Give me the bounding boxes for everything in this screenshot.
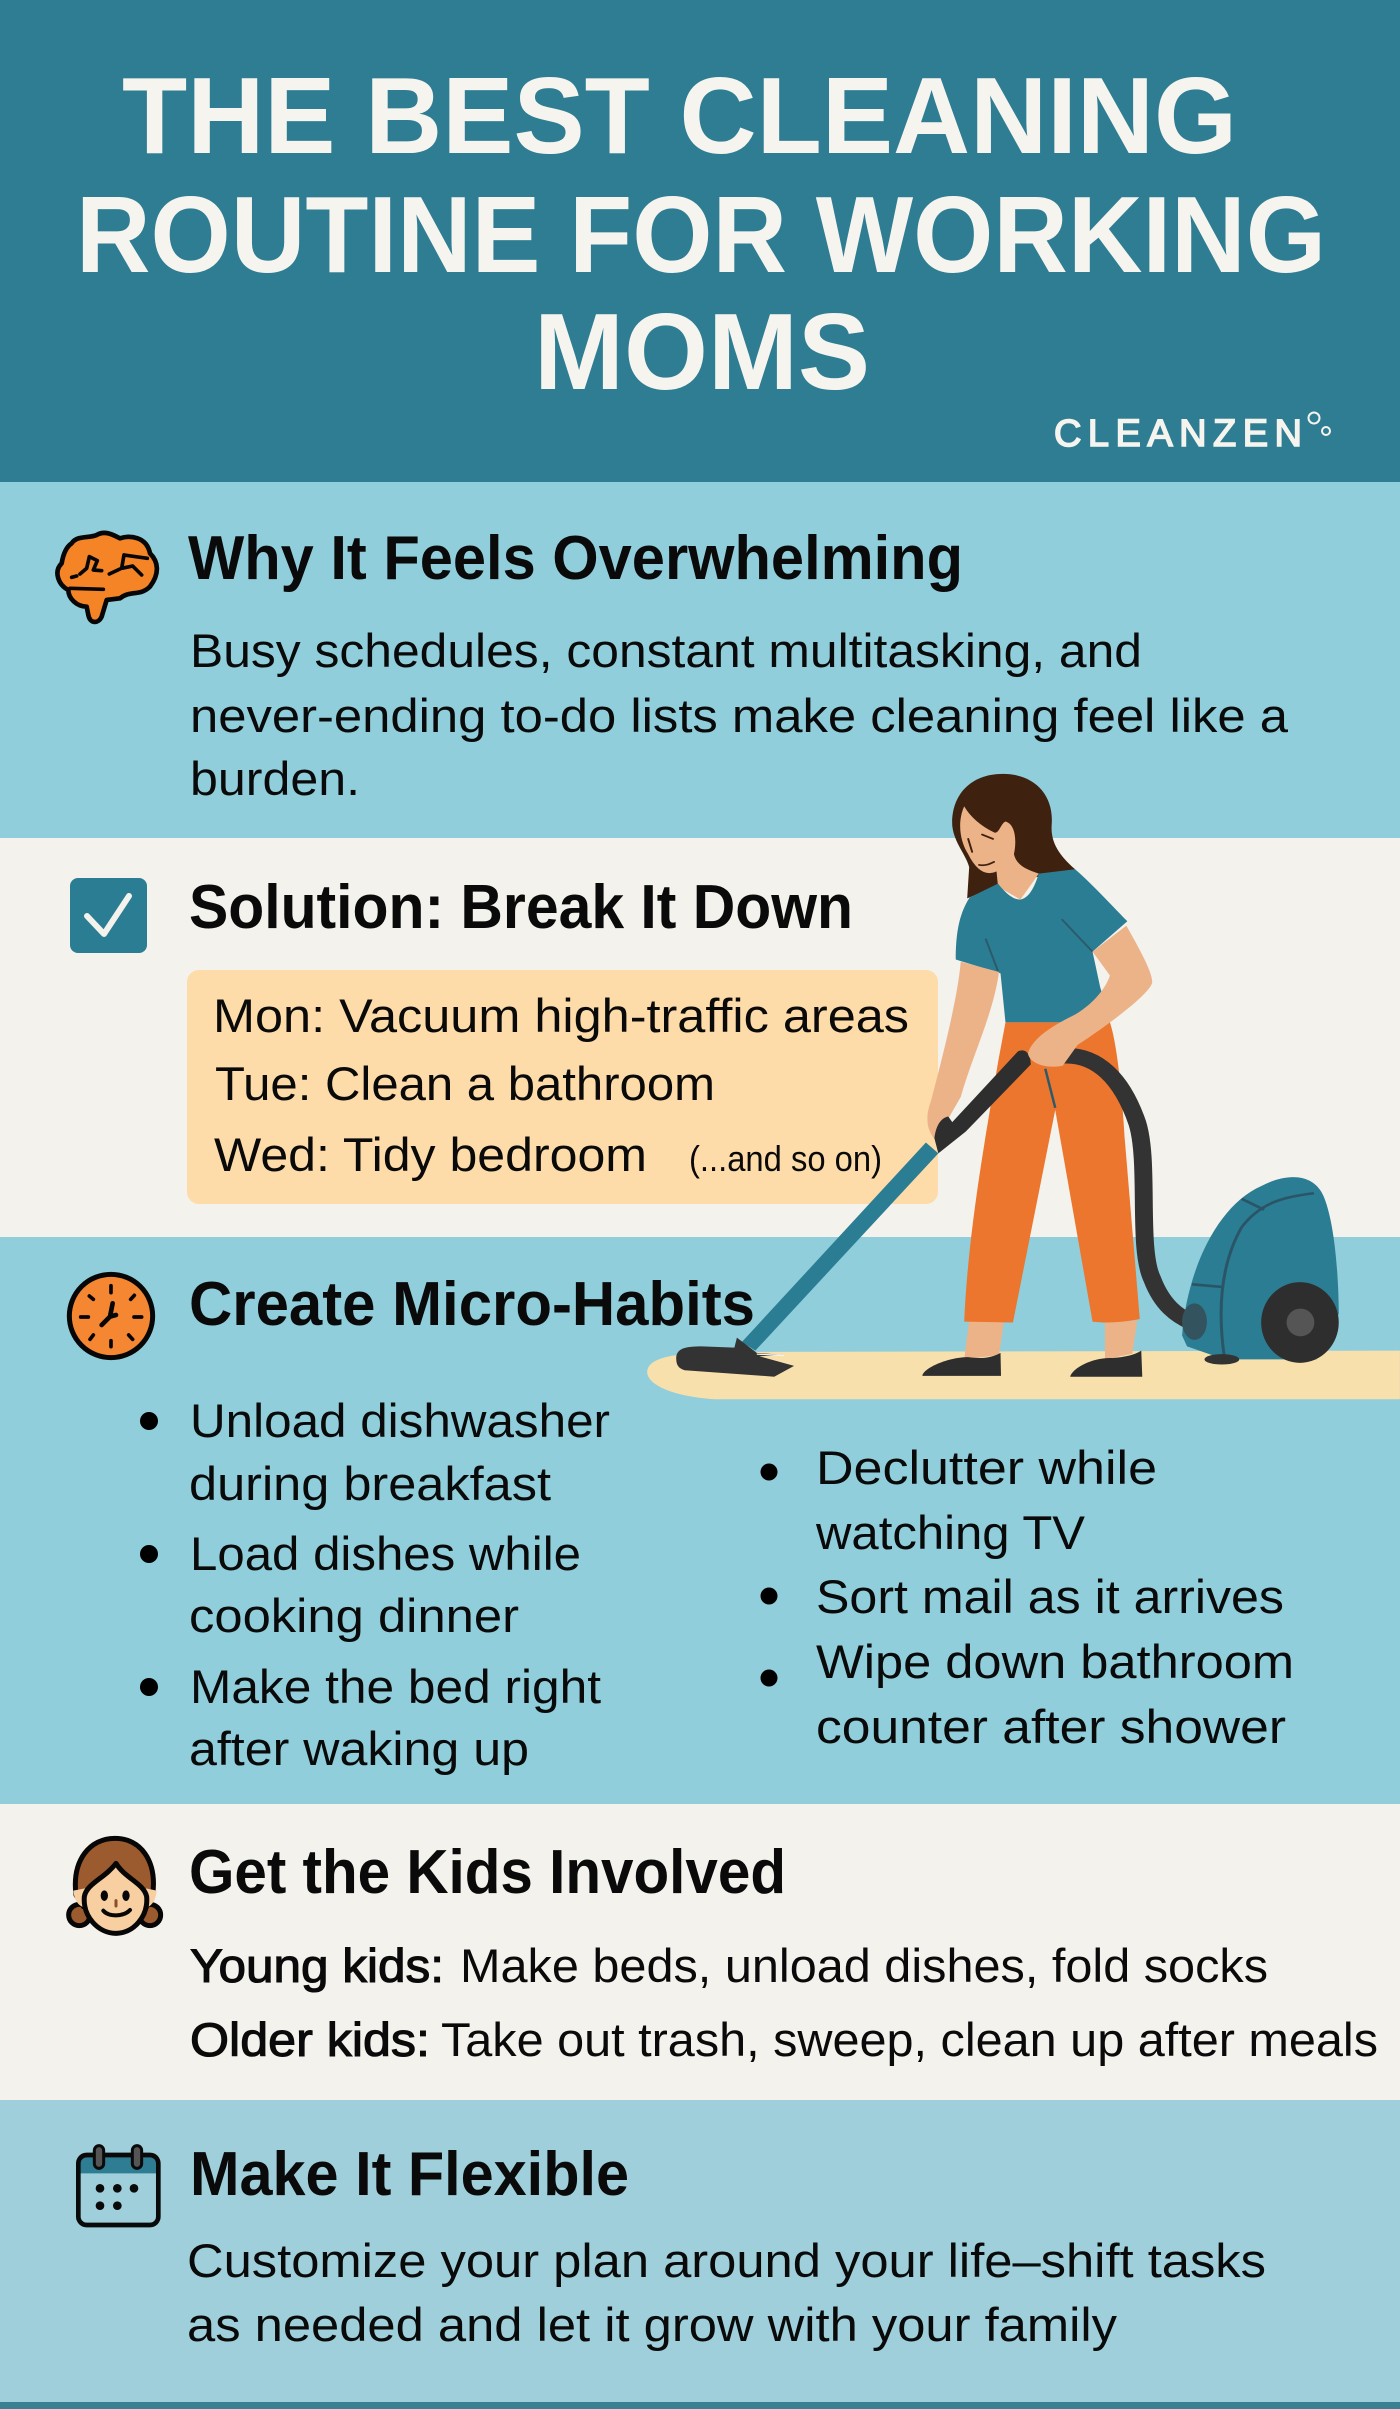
- bullet list: right column: watching TV: [815, 1506, 1086, 1559]
- text block: why it feels overwhelming: Busy schedules, constant multitasking, and: [190, 624, 1142, 677]
- floor: [647, 1351, 1400, 1399]
- left arm: [927, 962, 999, 1140]
- vacuum pole: [742, 1142, 938, 1351]
- text block: flexible: Customize your plan around your life–shift tasks: [187, 2234, 1266, 2287]
- panel: solution break it down: [0, 838, 1400, 1237]
- bullet list: right column: Sort mail as it arrives: [816, 1570, 1284, 1623]
- text block: older kids: Take out trash, sweep, clean up after meals: [441, 2013, 1378, 2066]
- bullet list: right column: counter after shower: [816, 1700, 1286, 1753]
- title: ROUTINE FOR WORKING: [76, 174, 1326, 296]
- panel: title header: [0, 0, 1400, 482]
- hair: [952, 774, 1075, 898]
- heading: micro-habits: Create Micro-Habits: [189, 1270, 755, 1339]
- vacuum wheel: [1261, 1282, 1339, 1363]
- vacuum body: [1182, 1177, 1339, 1359]
- right arm and hand: [1028, 926, 1152, 1067]
- text block: older kids: Older kids:: [190, 2013, 430, 2066]
- panel: make it flexible: [0, 2100, 1400, 2402]
- callout: weekly schedule: (...and so on): [689, 1138, 882, 1179]
- icon: child face: [69, 1838, 161, 1933]
- text block: young kids: Make beds, unload dishes, fold socks: [460, 1939, 1268, 1992]
- icon: checkbox: [70, 878, 147, 953]
- heading: kids: Get the Kids Involved: [189, 1838, 786, 1907]
- trousers: [964, 1022, 1140, 1322]
- bullet list: left column: Make the bed right: [190, 1660, 601, 1713]
- title: [76, 55, 1326, 413]
- logo: Cleanzen: CLEANZEN: [1054, 413, 1302, 455]
- bullet list: left column: after waking up: [189, 1722, 529, 1775]
- title: MOMS: [534, 291, 870, 413]
- bullet list: right column: Declutter while: [816, 1441, 1157, 1494]
- illustration: woman vacuuming: [647, 774, 1400, 1399]
- shirt: [956, 869, 1127, 1022]
- callout: weekly schedule: [187, 970, 938, 1204]
- face and neck: [960, 806, 1039, 900]
- bullet list: right column: Wipe down bathroom: [816, 1635, 1294, 1688]
- bullet list: left column: cooking dinner: [189, 1589, 519, 1642]
- text block: why it feels overwhelming: burden.: [190, 752, 360, 805]
- text block: flexible: [187, 2234, 1266, 2351]
- icon: clock: [69, 1274, 153, 1358]
- icon: calendar: [78, 2146, 158, 2225]
- bullet list: right column: [760, 1441, 1294, 1753]
- vacuum grip: [934, 1050, 1031, 1153]
- text block: why it feels overwhelming: [190, 624, 1289, 805]
- text block: young kids: Young kids:: [190, 1939, 444, 1992]
- panel: get the kids involved: [0, 1804, 1400, 2100]
- callout: weekly schedule: Tue: Clean a bathroom: [215, 1057, 715, 1110]
- shoes: [922, 1351, 1142, 1377]
- vacuum head: [676, 1338, 794, 1377]
- icon: brain: [57, 533, 157, 622]
- bullet list: left column: Unload dishwasher: [190, 1394, 610, 1447]
- panel: why it feels overwhelming: [0, 482, 1400, 838]
- bullet list: left column: Load dishes while: [190, 1527, 581, 1580]
- bullet list: left column: during breakfast: [189, 1457, 551, 1510]
- heading: flexible: Make It Flexible: [190, 2140, 629, 2209]
- heading: why it feels overwhelming: Why It Feels Overwhelming: [188, 524, 963, 593]
- bullet list: left column: [140, 1394, 610, 1775]
- title: THE BEST CLEANING: [122, 55, 1237, 177]
- panel: create micro-habits: [0, 1237, 1400, 1804]
- legs: [964, 1320, 1137, 1359]
- vacuum hose: [1063, 1056, 1192, 1322]
- heading: solution: Solution: Break It Down: [189, 873, 853, 942]
- text block: flexible: as needed and let it grow with your family: [187, 2298, 1118, 2351]
- callout: weekly schedule: Mon: Vacuum high-traffic areas: [213, 989, 909, 1042]
- text block: why it feels overwhelming: never-ending to-do lists make cleaning feel like a: [190, 689, 1289, 742]
- callout: weekly schedule: Wed: Tidy bedroom: [214, 1128, 647, 1181]
- footer band: [0, 2402, 1400, 2409]
